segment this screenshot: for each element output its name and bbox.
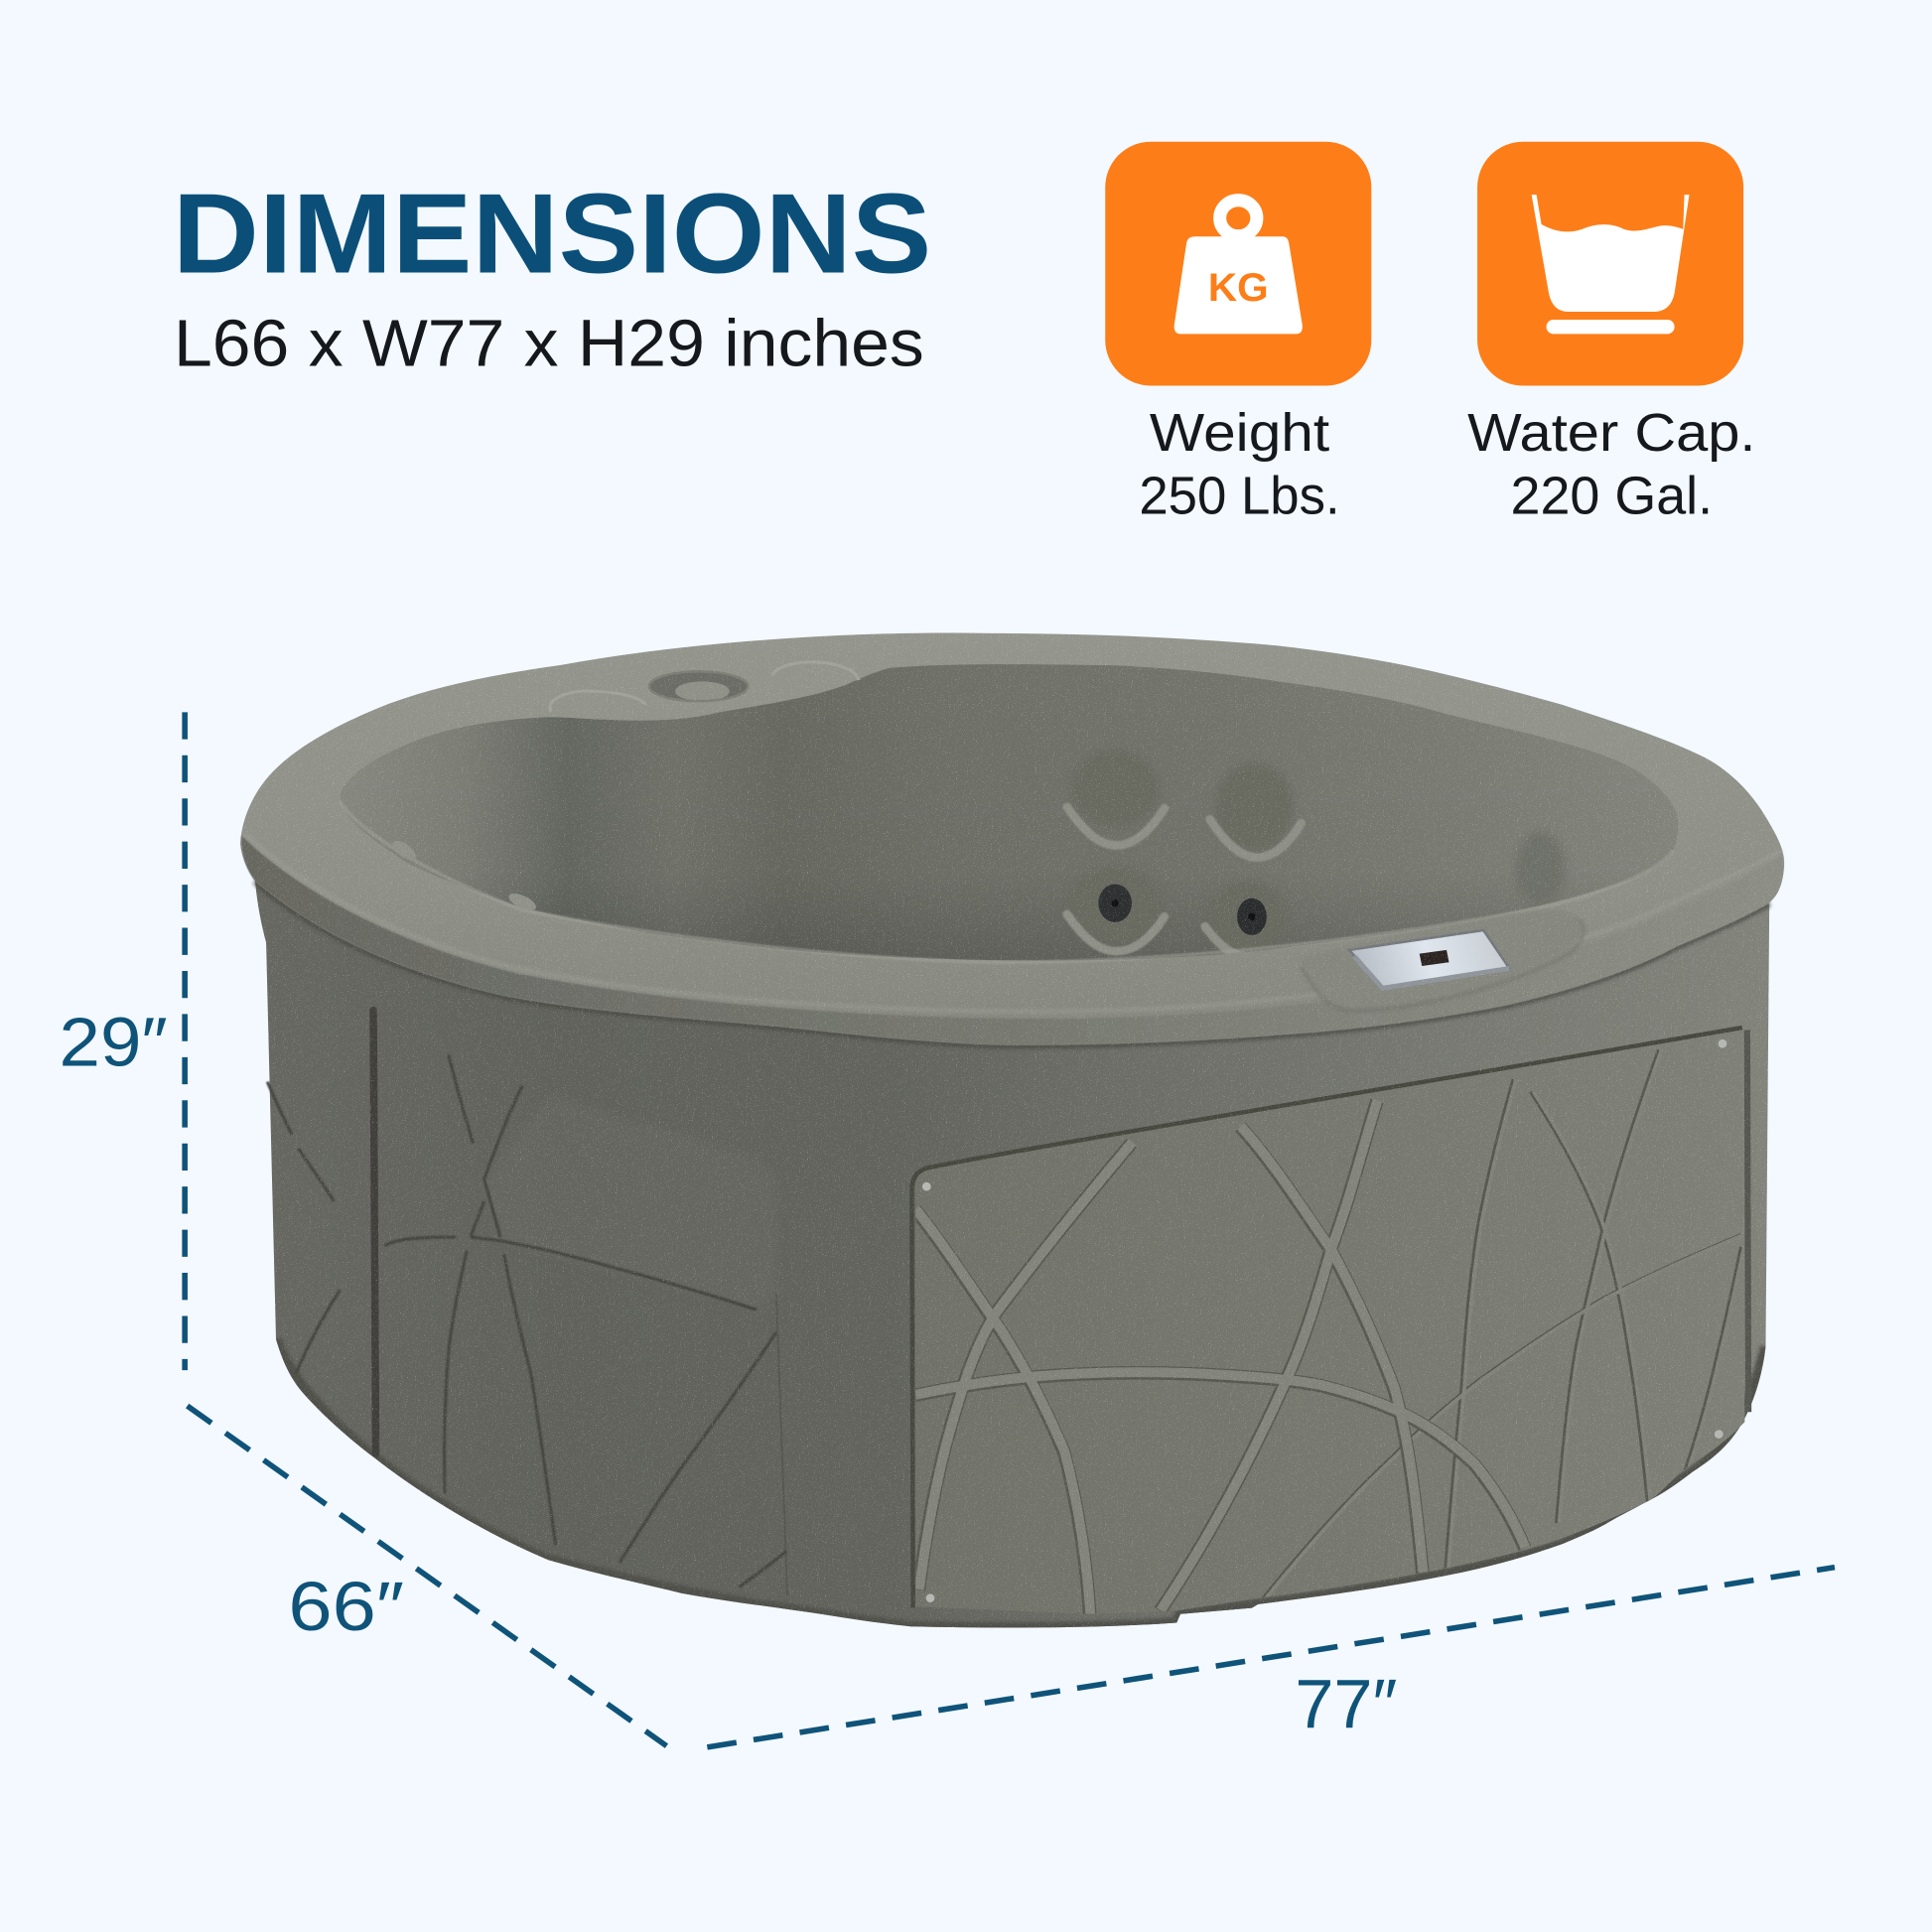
value: weight: 250 Lbs.	[1139, 468, 1340, 526]
cup lid right	[772, 662, 859, 680]
width label: 77″	[1295, 1665, 1397, 1742]
jet recesses	[1074, 752, 1565, 905]
height label: 29″	[60, 1004, 168, 1081]
length label: 66″	[288, 1568, 404, 1645]
icon: weight	[1105, 142, 1371, 385]
dimensions summary: L66 x W77 x H29 inches	[174, 307, 924, 381]
cup lid left	[550, 691, 645, 712]
hot tub	[234, 628, 1793, 1632]
label: water capacity: Water Cap.	[1467, 404, 1756, 463]
cup holder	[649, 671, 748, 701]
left side panel	[267, 1011, 787, 1595]
heading: DIMENSIONS	[173, 171, 931, 297]
control panel recess	[1297, 909, 1584, 1011]
length dimension	[188, 1406, 666, 1746]
width dashed line	[707, 1568, 1835, 1747]
width dimension	[707, 1568, 1835, 1747]
rim notches	[389, 837, 538, 913]
title block	[173, 171, 931, 381]
tub interior	[333, 659, 1688, 967]
value: water capacity: 220 Gal.	[1511, 468, 1713, 526]
access door panel	[911, 1028, 1748, 1614]
height dashed line	[183, 712, 187, 1370]
control panel	[1349, 930, 1509, 988]
label: weight: Weight	[1150, 404, 1329, 463]
stat: water capacity	[1467, 142, 1756, 526]
infographic canvas	[63, 141, 1835, 1750]
stat: weight	[1105, 142, 1371, 526]
tub rim	[240, 632, 1784, 1045]
icon: water basin	[1477, 142, 1743, 385]
jet contours	[1067, 807, 1302, 956]
jets	[1098, 884, 1267, 935]
speckled texture	[234, 628, 1793, 1632]
tub body	[255, 881, 1769, 1627]
icon: weight: KG	[1208, 266, 1269, 310]
length dashed line	[188, 1406, 666, 1746]
